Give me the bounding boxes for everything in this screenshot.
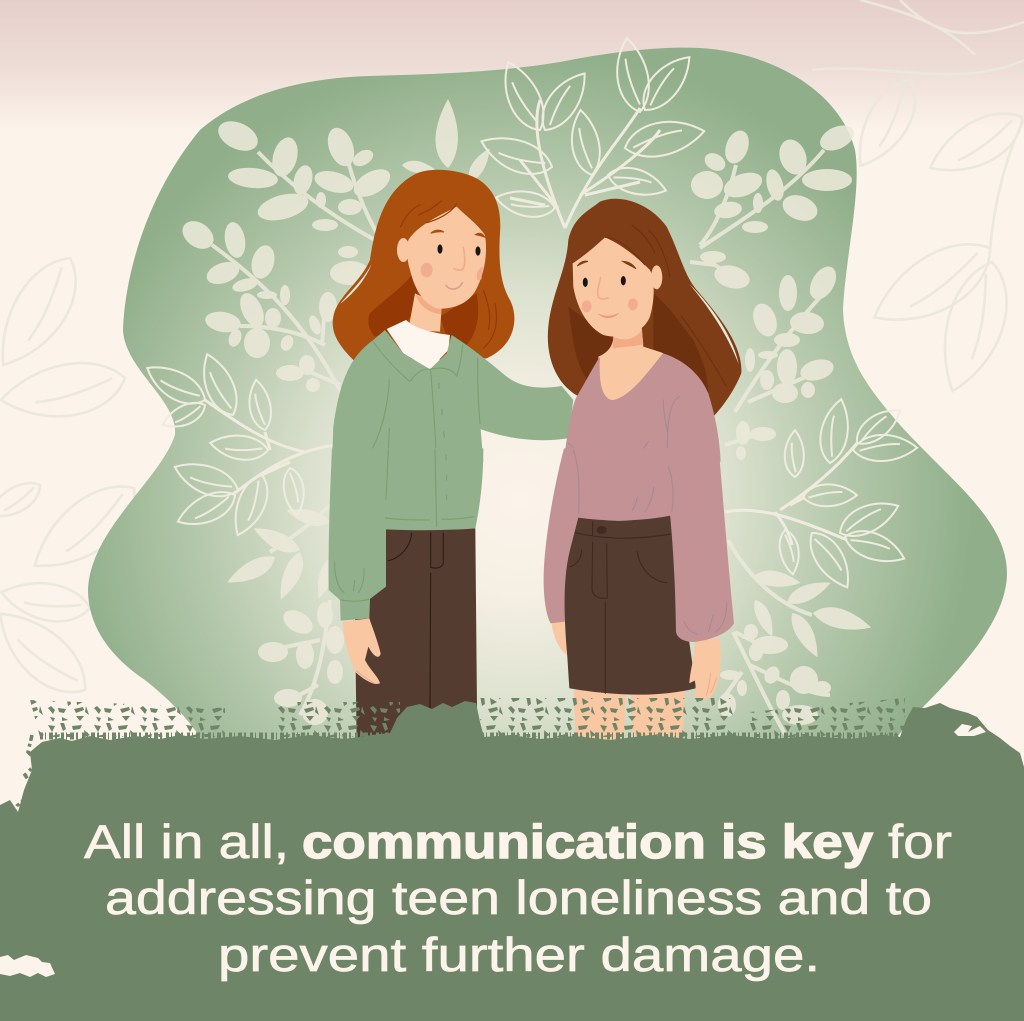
- jagged grass edge: [40, 732, 900, 740]
- eyes, cheeks and mouth: [577, 237, 645, 318]
- skirt seams: [570, 522, 671, 693]
- blouse body and left sleeve: [544, 448, 720, 623]
- caption line 1: for: [888, 815, 952, 868]
- outlined sprig: lower left: [140, 349, 335, 540]
- outlined sprig: lower right: [725, 397, 918, 594]
- hand crease: [356, 671, 374, 683]
- outlined sprig: top centre: [476, 36, 707, 228]
- caption line 1: [84, 815, 952, 868]
- ear: [397, 238, 410, 262]
- cream gaps in grass: [954, 724, 986, 736]
- white turtleneck: [387, 320, 450, 369]
- pink top band: [0, 0, 1024, 130]
- lower body of girl: [544, 448, 734, 741]
- eyes, cheeks and mouth: [401, 201, 496, 348]
- faint background leaves: [0, 0, 1024, 709]
- jacket lower and sleeve: [329, 448, 483, 621]
- brown hair: [548, 199, 741, 417]
- caption line 2: addressing teen loneliness and to: [105, 871, 932, 924]
- caption text: [84, 815, 952, 981]
- leaf: top centre pointed leaves: [401, 99, 494, 185]
- dark green footer band: [0, 701, 1024, 1021]
- red hair: [333, 170, 514, 360]
- hair shadow: [368, 273, 478, 345]
- right hand of girl: [689, 638, 721, 700]
- neck shadow: [416, 295, 442, 314]
- brown skirt: [565, 516, 696, 695]
- grass fringe specks: [18, 698, 905, 812]
- figure: friend with red hair: [329, 170, 573, 743]
- caption line 1: All in all,: [84, 815, 289, 868]
- mauve blouse: [563, 353, 721, 462]
- lower body of friend: [329, 448, 483, 743]
- body folds: [573, 450, 654, 513]
- cream grass patch lower left: [0, 955, 55, 977]
- green jacket upper: [332, 330, 573, 462]
- hand creases: [706, 673, 717, 696]
- caption line 1: communication is key: [302, 815, 873, 868]
- brown trousers: [355, 528, 477, 743]
- sprig: pointed lower right leaves: [728, 540, 874, 661]
- neck and chest: [598, 327, 663, 400]
- ear: [651, 265, 662, 289]
- trouser seams: [388, 533, 443, 710]
- sprig: mid left: [177, 215, 370, 400]
- filled leaf sprigs: [177, 99, 874, 742]
- sprig: bottom left: [258, 600, 344, 725]
- green blob: [88, 48, 1007, 745]
- hair highlight sliver: [340, 264, 372, 304]
- blouse folds: [569, 397, 679, 460]
- outlined leaf sprigs: [140, 36, 918, 594]
- jacket lower seams: [335, 450, 473, 601]
- sprig: bottom right: [718, 624, 831, 742]
- neck: [408, 293, 442, 332]
- hair highlight sliver: [689, 284, 739, 364]
- upper body of girl: [548, 199, 741, 462]
- jacket seams: [370, 342, 480, 462]
- figure: girl with brown hair: [544, 199, 741, 741]
- face: [573, 237, 654, 337]
- friend hand: [343, 618, 381, 684]
- sprig: top left: [213, 115, 395, 245]
- sprig: pointed lower left leaves: [224, 504, 337, 603]
- neck shadow: [613, 330, 643, 349]
- right sleeve: [667, 448, 734, 642]
- skirt button: [597, 526, 607, 534]
- upper body of friend: [332, 170, 573, 462]
- hair shadow: [568, 293, 708, 393]
- face: [407, 207, 486, 309]
- caption line 3: prevent further damage.: [218, 928, 820, 981]
- left hand of girl: [552, 618, 567, 655]
- sleeve folds: [668, 467, 727, 634]
- hair strands: [632, 225, 727, 387]
- sprig: top right: [690, 120, 858, 292]
- legs: [573, 690, 685, 741]
- sprig: mid right: [725, 262, 842, 460]
